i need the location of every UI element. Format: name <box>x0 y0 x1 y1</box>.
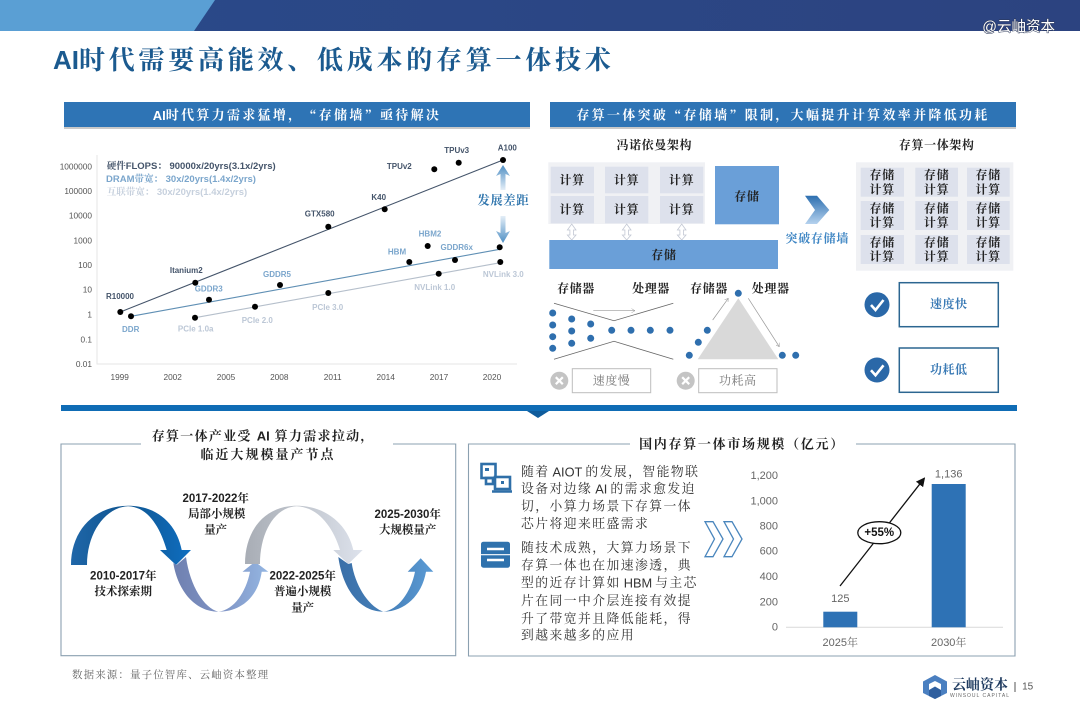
text: small compute scenarios: 切，小算力场景下存算一体 <box>521 498 692 514</box>
cell labels: 存储 <box>869 200 895 216</box>
diagram: bottleneck funnel <box>549 280 674 359</box>
text: small compute scenarios: 芯片将迎来旺盛需求 <box>521 516 649 531</box>
section header: left: AI时代算力需求猛增，“存储墙”亟待解决 <box>153 106 441 124</box>
text: small compute scenarios <box>521 464 699 531</box>
memory block: bottom: 存储 <box>651 247 677 262</box>
cell labels: 存储 <box>924 200 950 216</box>
value axis: 1,000 <box>750 495 778 507</box>
point labels: HBM <box>388 248 406 256</box>
y axis labels: 100000 <box>64 186 92 196</box>
benefit: fast: 速度快 <box>930 296 968 311</box>
cell labels: 计算 <box>924 214 950 230</box>
compute cells: 计算 <box>669 202 695 216</box>
cell labels: 计算 <box>869 182 895 196</box>
y axis labels: 100 <box>78 260 92 270</box>
diagram: von Neumann architecture <box>548 137 779 269</box>
icon: edge devices <box>482 464 512 492</box>
header band <box>0 0 1080 36</box>
y axis labels: 1000 <box>74 235 92 245</box>
diagram: energy hill <box>686 280 799 359</box>
point labels: NVLink 3.0 <box>483 270 524 279</box>
cell labels: 存储 <box>869 167 895 182</box>
bar: 2030: 1,136 <box>935 468 962 480</box>
point labels: PCIe 3.0 <box>312 303 344 312</box>
point labels: DDR <box>122 325 140 334</box>
page number <box>1015 682 1034 692</box>
point labels: HBM2 <box>419 230 442 238</box>
diagram: bottleneck funnel: 处理器 <box>632 280 670 295</box>
point labels: TPUv3 <box>444 146 470 155</box>
compute cells: 计算 <box>614 172 640 187</box>
gap callout: 发展差距 <box>478 193 529 208</box>
benefit: low power <box>864 348 998 392</box>
cell labels: 计算 <box>975 214 1001 230</box>
x axis: 2005 <box>217 372 236 382</box>
panel heading: 存算一体产业受 AI 算力需求拉动， <box>152 428 375 444</box>
x axis: 2011 <box>324 372 342 382</box>
text: large compute scenarios: 到越来越多的应用 <box>521 628 635 642</box>
y axis labels: 0.01 <box>76 359 92 369</box>
compute cells: 计算 <box>559 202 585 216</box>
bar: 2025: 125 <box>831 593 849 605</box>
stage labels: 大规模量产 <box>379 523 437 537</box>
wave arrow 3 <box>245 506 363 564</box>
value axis: 0 <box>772 622 778 634</box>
compute cells: 计算 <box>614 202 640 216</box>
y axis labels: 1 <box>87 309 92 319</box>
stage labels: 量产 <box>291 600 315 614</box>
heading: 冯诺依曼架构 <box>616 137 692 152</box>
cell labels: 计算 <box>975 248 1001 264</box>
stage labels: 2017-2022年 <box>182 491 249 505</box>
heading: 存算一体架构 <box>899 137 975 152</box>
point labels: A100 <box>498 144 517 152</box>
memory block: side <box>715 166 779 224</box>
text: large compute scenarios: 随技术成熟，大算力场景下 <box>521 540 692 556</box>
legend: DRAM带宽： 30x/20yrs(1.4x/2yrs) <box>106 173 256 185</box>
wave arrow 4 <box>338 557 433 612</box>
point labels: TPUv2 <box>387 162 412 171</box>
icon: server <box>481 542 510 568</box>
cell labels: 计算 <box>869 214 895 230</box>
value axis: 600 <box>760 546 778 558</box>
panel heading <box>152 428 375 462</box>
value axis <box>750 470 778 634</box>
memory block: bottom <box>549 240 778 269</box>
y axis labels: 0.1 <box>80 334 92 344</box>
logo <box>923 675 1010 699</box>
panel: industry timeline <box>61 428 456 656</box>
cell labels: 存储 <box>975 167 1001 182</box>
stage labels <box>90 491 441 614</box>
growth arrow <box>840 478 924 586</box>
cell labels: 存储 <box>869 234 895 250</box>
legend: 互联带宽： 30x/20yrs(1.4x/2yrs) <box>107 186 247 198</box>
legend <box>106 160 276 198</box>
cell labels: 计算 <box>869 248 895 264</box>
point labels: GDDR5 <box>263 270 292 279</box>
point labels: PCIe 1.0a <box>178 324 214 334</box>
x axis: 1999 <box>110 372 129 382</box>
panel heading: 国内存算一体市场规模（亿元） <box>639 436 845 452</box>
point labels: Itanium2 <box>170 266 203 275</box>
drawback: slow <box>550 369 651 393</box>
text: large compute scenarios: 升了带宽并且降低能耗，得 <box>521 611 692 627</box>
bar: 2025 <box>823 593 858 649</box>
point labels: PCIe 2.0 <box>242 316 273 325</box>
stage labels: 普遍小规模 <box>274 584 332 598</box>
x axis: 2017 <box>430 372 449 382</box>
icon: double chevron <box>705 522 742 557</box>
drawback: high power <box>677 369 777 393</box>
text: small compute scenarios: 随着 AIOT 的发展，智能物联 <box>521 464 699 480</box>
chevron: breaking the memory wall <box>786 196 849 245</box>
point labels: GTX580 <box>305 210 335 218</box>
stage labels: 2025-2030年 <box>374 507 441 521</box>
cell grid <box>861 168 1010 264</box>
line chart: compute vs memory growth <box>60 144 529 382</box>
memory block: side: 存储 <box>734 188 760 204</box>
diagram: energy hill: 处理器 <box>752 280 790 295</box>
stage labels: 量产 <box>204 523 228 537</box>
value axis: 800 <box>760 520 778 532</box>
point labels: GDDR6x <box>440 243 473 252</box>
text: small compute scenarios: 设备对边缘 AI 的需求愈发迫 <box>521 481 696 496</box>
data path arrows <box>567 224 686 240</box>
x axis <box>97 155 517 382</box>
bar: 2030 <box>931 468 966 649</box>
point labels: K40 <box>371 193 387 202</box>
cell labels: 存储 <box>975 200 1001 216</box>
wave arrow 2 <box>173 557 268 612</box>
header band: @云岫资本 <box>982 18 1055 36</box>
gap callout <box>478 165 529 243</box>
point labels: GDDR3 <box>195 284 223 294</box>
value axis: 200 <box>760 596 778 608</box>
x axis: 2020 <box>483 372 502 382</box>
chevron: breaking the memory wall: 突破存储墙 <box>786 230 849 245</box>
y axis labels: 10000 <box>69 211 92 221</box>
point labels <box>106 144 524 334</box>
panel: market size <box>468 436 1015 656</box>
text: large compute scenarios: 片在同一中介层连接有效提 <box>521 593 692 608</box>
stage labels: 2010-2017年 <box>90 569 157 583</box>
cell labels: 计算 <box>975 182 1001 196</box>
stage labels: 局部小规模 <box>188 506 246 520</box>
drawback: slow: 速度慢 <box>593 372 630 388</box>
cell labels: 计算 <box>924 182 950 196</box>
section header: right: 存算一体突破“存储墙”限制，大幅提升计算效率并降低功耗 <box>576 106 990 124</box>
benefit: fast <box>864 283 998 327</box>
bar: 2030: 2030年 <box>931 635 966 649</box>
diagram: in-memory computing architecture <box>856 137 1013 271</box>
title: AI时代需要高能效、低成本的存算一体技术 <box>53 45 615 75</box>
text: large compute scenarios: 存算一体也在加速渗透，典 <box>521 558 692 574</box>
growth arrow: +55% <box>864 527 894 539</box>
cell labels: 存储 <box>924 167 950 182</box>
divider with pointer <box>61 405 1017 418</box>
y axis labels <box>60 162 92 369</box>
value axis: 1,200 <box>750 470 778 482</box>
x axis: 2002 <box>163 372 182 382</box>
cell labels: 存储 <box>924 234 950 250</box>
stage labels: 技术探索期 <box>95 584 153 598</box>
cell labels: 存储 <box>975 234 1001 250</box>
trend lines <box>120 160 503 318</box>
bar: 2025: 2025年 <box>823 635 858 649</box>
wave arrow 1 <box>71 506 191 565</box>
diagram: bottleneck funnel: 存储器 <box>557 280 595 295</box>
drawback: high power: 功耗高 <box>719 372 757 388</box>
cell labels: 计算 <box>924 248 950 264</box>
diagram: energy hill: 存储器 <box>690 280 728 295</box>
x axis: 2014 <box>376 372 395 382</box>
text: large compute scenarios: 型的近存计算如 HBM 与主芯 <box>521 575 698 590</box>
y axis labels: 1000000 <box>60 162 92 172</box>
text: large compute scenarios <box>521 540 698 642</box>
section header: right <box>550 102 1016 129</box>
logo: WINSOUL CAPITAL <box>950 693 1010 699</box>
compute cells: 计算 <box>559 172 585 187</box>
compute cells <box>548 162 705 224</box>
section header: left <box>64 102 530 129</box>
page number: 15 <box>1022 682 1034 692</box>
point labels: NVLink 1.0 <box>414 283 456 292</box>
compute cells: 计算 <box>669 172 695 187</box>
value axis: 400 <box>760 571 778 583</box>
funnel dots <box>549 310 674 352</box>
point labels: R10000 <box>106 292 135 301</box>
legend: 硬件FLOPS： 90000x/20yrs(3.1x/2yrs) <box>107 160 276 172</box>
source note: 数据来源：量子位智库、云岫资本整理 <box>72 668 269 681</box>
benefit: low power: 功耗低 <box>930 362 968 376</box>
panel heading: 临近大规模量产节点 <box>200 447 336 462</box>
cell labels <box>869 167 1001 264</box>
bar chart: market size <box>750 468 1003 649</box>
x axis: 2008 <box>270 372 289 382</box>
y axis labels: 10 <box>83 285 92 295</box>
data points <box>117 157 506 321</box>
logo: 云岫资本 <box>952 677 1008 694</box>
stage labels: 2022-2025年 <box>269 569 336 583</box>
